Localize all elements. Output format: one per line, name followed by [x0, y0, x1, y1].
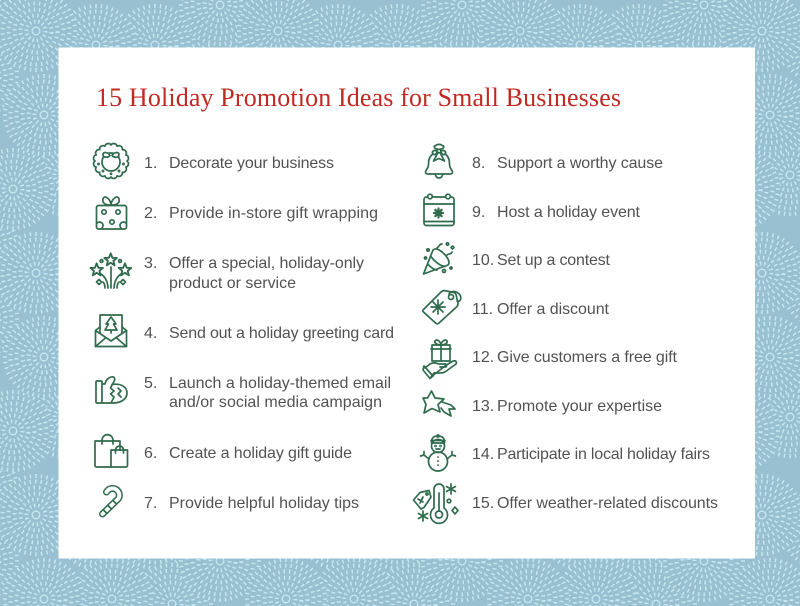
item 4 [96, 315, 394, 346]
item 9 [424, 194, 641, 226]
icon: mitten [96, 377, 127, 403]
icon: calendar [424, 194, 454, 226]
label: Launch a holiday-themed email [169, 375, 391, 392]
icon: wreath [94, 144, 128, 178]
label: Participate in local holiday fairs [497, 446, 710, 463]
number: 15. [472, 495, 494, 512]
icon: thermometer and tag [414, 484, 458, 523]
icon: hand holding gift [423, 340, 456, 378]
label: and/or social media campaign [169, 394, 382, 411]
number: 5. [144, 375, 157, 392]
number: 13. [472, 398, 494, 415]
icon: party popper [424, 243, 454, 274]
item 3 [90, 253, 364, 292]
icon: gift box [96, 197, 126, 229]
item 12 [423, 340, 678, 378]
item 10 [424, 243, 611, 274]
number: 11. [472, 301, 493, 318]
label: Send out a holiday greeting card [169, 325, 394, 342]
number: 12. [472, 349, 494, 366]
item 8 [426, 144, 663, 178]
label: product or service [169, 275, 296, 292]
label: Give customers a free gift [497, 349, 678, 366]
item 14 [420, 435, 710, 471]
number: 2. [144, 205, 157, 222]
icon: price tag [423, 290, 461, 324]
number: 10. [472, 252, 494, 269]
item 6 [95, 435, 352, 467]
number: 6. [144, 445, 157, 462]
label: Offer weather-related discounts [497, 495, 718, 512]
item 5 [96, 375, 391, 411]
label: Set up a contest [497, 252, 611, 269]
label: Create a holiday gift guide [169, 445, 352, 462]
item 13 [423, 391, 662, 416]
item 15 [414, 484, 718, 523]
item 2 [96, 197, 378, 229]
label: Provide in-store gift wrapping [169, 205, 378, 222]
number: 8. [472, 155, 485, 172]
panel: white card [58, 48, 755, 558]
number: 4. [144, 325, 157, 342]
icon: envelope with card [96, 315, 126, 346]
label: Decorate your business [169, 155, 334, 172]
icon: fireworks [90, 253, 131, 288]
item 7 [102, 488, 359, 514]
label [169, 255, 364, 292]
title: 15 Holiday Promotion Ideas for Small Businesses [96, 83, 621, 112]
icon: shooting star [423, 391, 455, 416]
item 11 [423, 290, 610, 324]
label: Offer a special, holiday-only [169, 255, 364, 272]
number: 7. [144, 495, 157, 512]
number: 9. [472, 204, 485, 221]
label: Provide helpful holiday tips [169, 495, 359, 512]
label: Promote your expertise [497, 398, 662, 415]
number: 3. [144, 255, 157, 272]
icon: shopping bags [95, 435, 128, 467]
label: Host a holiday event [497, 204, 641, 221]
icon: snowman [420, 435, 456, 471]
number: 14. [472, 446, 494, 463]
label: Support a worthy cause [497, 155, 663, 172]
label: Offer a discount [497, 301, 610, 318]
label [169, 375, 391, 411]
number: 1. [144, 155, 157, 172]
item 1 [94, 144, 334, 178]
icon: candy cane [102, 488, 119, 514]
icon: bell [426, 144, 452, 178]
